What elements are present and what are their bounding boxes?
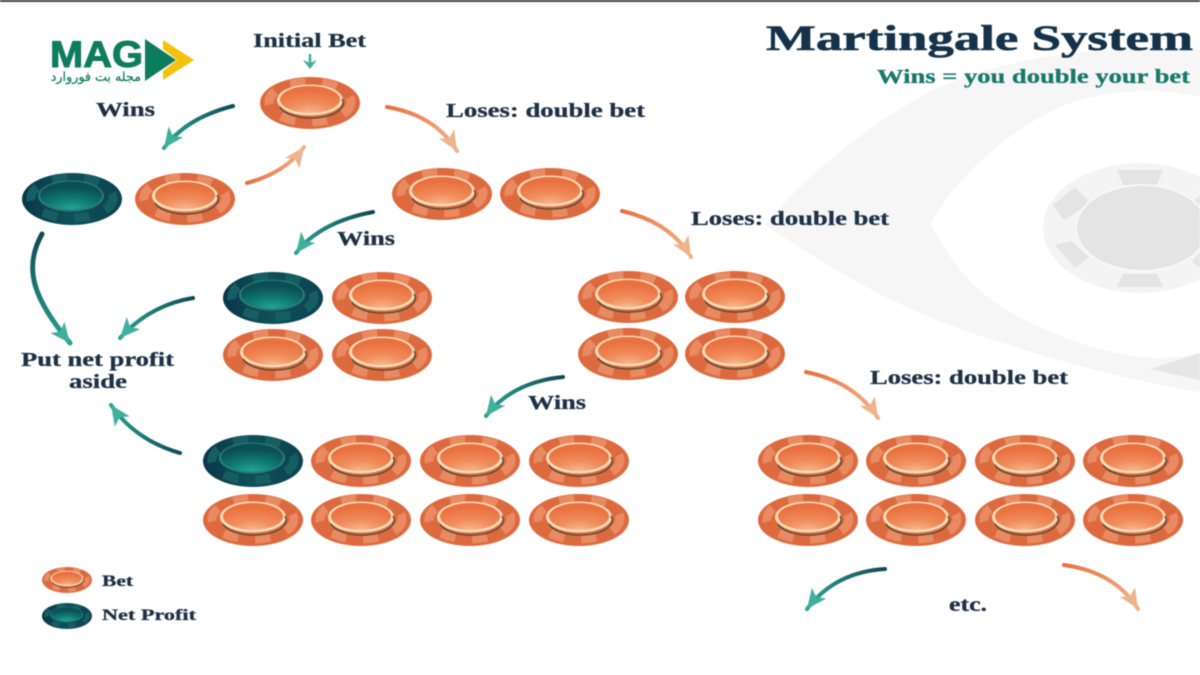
chip: initial bet: [260, 77, 360, 129]
label: put net profit aside: Put net profit: [21, 349, 174, 371]
logo tagline: مجله بت فوروارد: [51, 69, 141, 85]
logo wordmark: MAG: [50, 34, 143, 75]
label: wins 1: Wins: [96, 99, 155, 121]
arrow: initial bet: [303, 54, 317, 69]
label: initial bet: Initial Bet: [253, 30, 366, 52]
chips: fourth bet: [758, 435, 1183, 546]
chips: third win: [203, 435, 629, 546]
chips: third bet: [578, 271, 785, 380]
legend label: net profit: Net Profit: [102, 607, 197, 624]
background eye shape: [765, 48, 1200, 392]
label: loses 2: Loses: double bet: [691, 208, 889, 230]
label: wins 3: Wins: [528, 392, 586, 414]
arrow: first profit to aside: [33, 234, 70, 343]
watermark chip: [1043, 163, 1200, 293]
title: Martingale System: [766, 18, 1193, 58]
label: wins 2: Wins: [337, 228, 395, 250]
arrow: loses second round: [622, 211, 691, 257]
chips: second bet: [392, 168, 600, 220]
legend: [42, 567, 197, 629]
chips: first win: [22, 173, 235, 225]
subtitle: Wins = you double your bet: [877, 66, 1190, 88]
arrow: wins third round: [486, 377, 563, 416]
legend chip: bet: [42, 567, 92, 593]
arrow: wins second round: [296, 212, 373, 253]
label: loses 1: Loses: double bet: [446, 100, 645, 122]
chips: second win: [223, 272, 432, 381]
arrow: wins from initial bet: [164, 106, 233, 148]
arrow: loses from initial bet: [387, 107, 457, 151]
label: loses 3: Loses: double bet: [870, 367, 1068, 389]
logo: [50, 34, 194, 85]
top edge line: [0, 0, 1200, 2]
label: put net profit aside: aside: [69, 371, 127, 393]
legend chip: net profit: [42, 603, 92, 629]
label: put net profit aside: [21, 349, 174, 393]
legend label: bet: Bet: [102, 573, 134, 590]
label: etc: etc.: [949, 594, 987, 616]
arrow: second profit to aside: [120, 298, 193, 338]
arrow: third profit to aside: [111, 405, 180, 453]
arrow: etc wins: [807, 569, 885, 609]
logo chevron: [163, 40, 194, 80]
arrow: etc loses: [1064, 565, 1138, 609]
arrow: return to initial bet: [247, 147, 304, 183]
arrow: loses third round: [806, 372, 878, 418]
logo play triangle: [145, 39, 176, 81]
